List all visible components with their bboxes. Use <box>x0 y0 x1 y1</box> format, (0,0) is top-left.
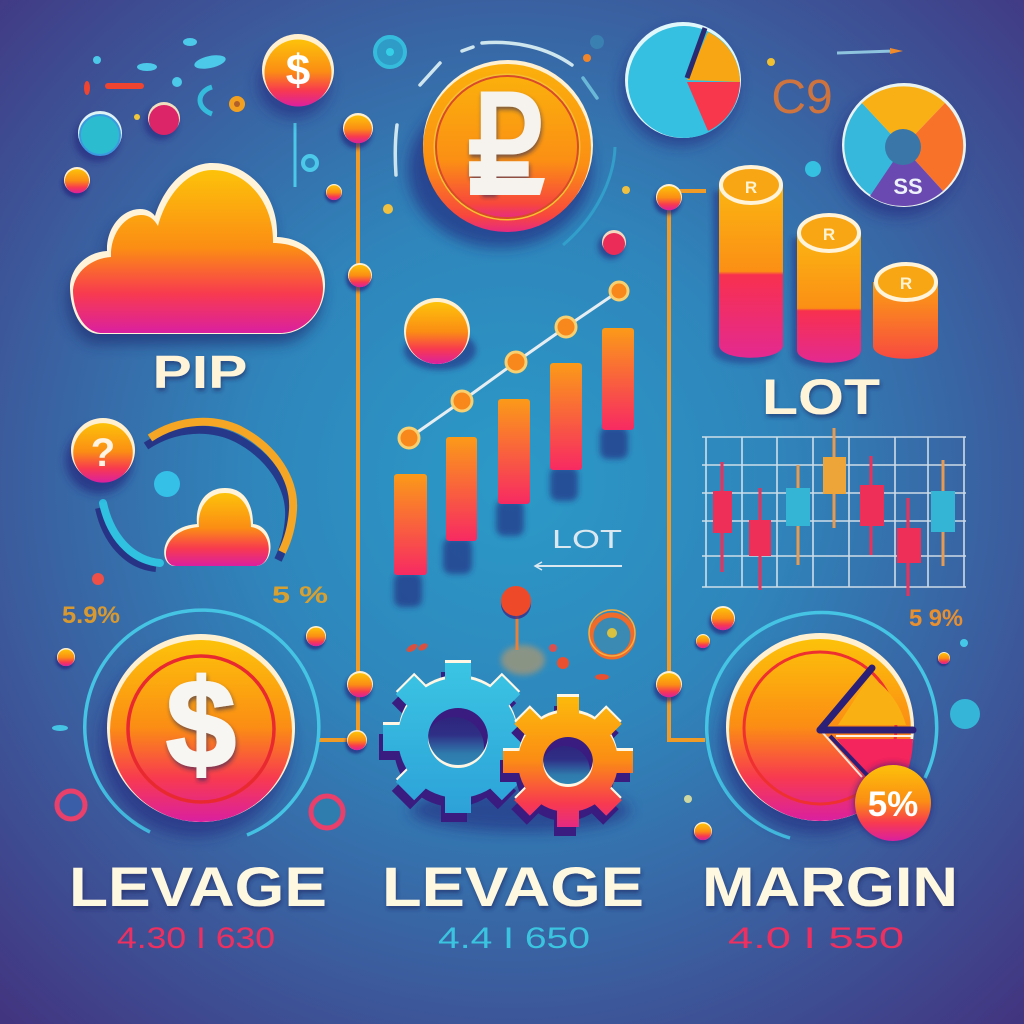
dot: red <box>92 573 104 585</box>
decorative confetti top left <box>84 38 342 203</box>
label: gauge percentage: 5 % <box>272 582 328 609</box>
icon: orange ring <box>589 610 635 657</box>
ball: red <box>598 230 626 259</box>
dot: orange <box>304 626 326 650</box>
dots around margin pie <box>684 606 980 843</box>
figure: right value: 4.0 I 550 <box>728 922 904 955</box>
chart: ring pie: SS <box>893 174 923 199</box>
chart: margin pie <box>707 612 937 843</box>
icon: large dollar coin <box>85 610 319 837</box>
gear: orange <box>500 694 633 836</box>
ball: magenta <box>144 102 180 140</box>
badge: 5%: 5% <box>868 785 918 824</box>
figure: left value: 4.30 I 630 <box>117 922 275 955</box>
ball: teal <box>74 111 122 162</box>
label: PIP: PIP <box>152 346 248 398</box>
icon: small dollar coin: $ <box>286 46 310 95</box>
label: MARGIN: MARGIN <box>702 855 958 918</box>
icon: large currency coin: ₽ <box>467 70 543 221</box>
chart: rising bars with line <box>394 282 634 607</box>
chart: cylinders <box>713 167 938 368</box>
icon: cloud with PIP <box>67 163 325 398</box>
chart: cylinders: R <box>900 274 912 293</box>
dot: cyan <box>805 161 821 177</box>
badge: 5% <box>853 763 933 843</box>
label: LEVAGE centre: LEVAGE <box>382 855 644 918</box>
icon: gears <box>379 660 634 838</box>
chart: cylinders: R <box>823 225 835 244</box>
dots around dollar coin <box>52 648 343 828</box>
icon: orange streak <box>767 48 903 66</box>
label: right percentage: 5 9% <box>909 605 963 632</box>
connector nodes <box>340 113 682 754</box>
icon: large dollar coin: $ <box>166 655 236 794</box>
label: small LOT <box>535 524 622 570</box>
chart: candlestick grid <box>702 428 966 596</box>
connector lines <box>318 130 706 740</box>
figure: centre value: 4.4 I 650 <box>438 922 590 955</box>
icon: small dollar coin <box>258 34 334 118</box>
gear: blue <box>379 660 521 822</box>
icon: split ball <box>404 298 476 370</box>
icon: question gauge <box>66 418 293 568</box>
ball: orange <box>62 167 90 198</box>
label: LOT: LOT <box>762 369 880 425</box>
chart: top pie <box>622 22 741 146</box>
label: small LOT: LOT <box>552 524 622 554</box>
icon: pin marker <box>405 586 609 680</box>
icon: question gauge: ? <box>91 431 115 475</box>
chart: cylinders: R <box>745 178 757 197</box>
label: LEVAGE left: LEVAGE <box>69 855 327 918</box>
label: orange squiggle: C9 <box>771 71 833 124</box>
label: left percentage: 5.9% <box>62 602 120 629</box>
icon: orbit ring dots <box>375 35 630 214</box>
chart: ring pie <box>836 83 966 217</box>
icon: large currency coin <box>395 42 615 248</box>
